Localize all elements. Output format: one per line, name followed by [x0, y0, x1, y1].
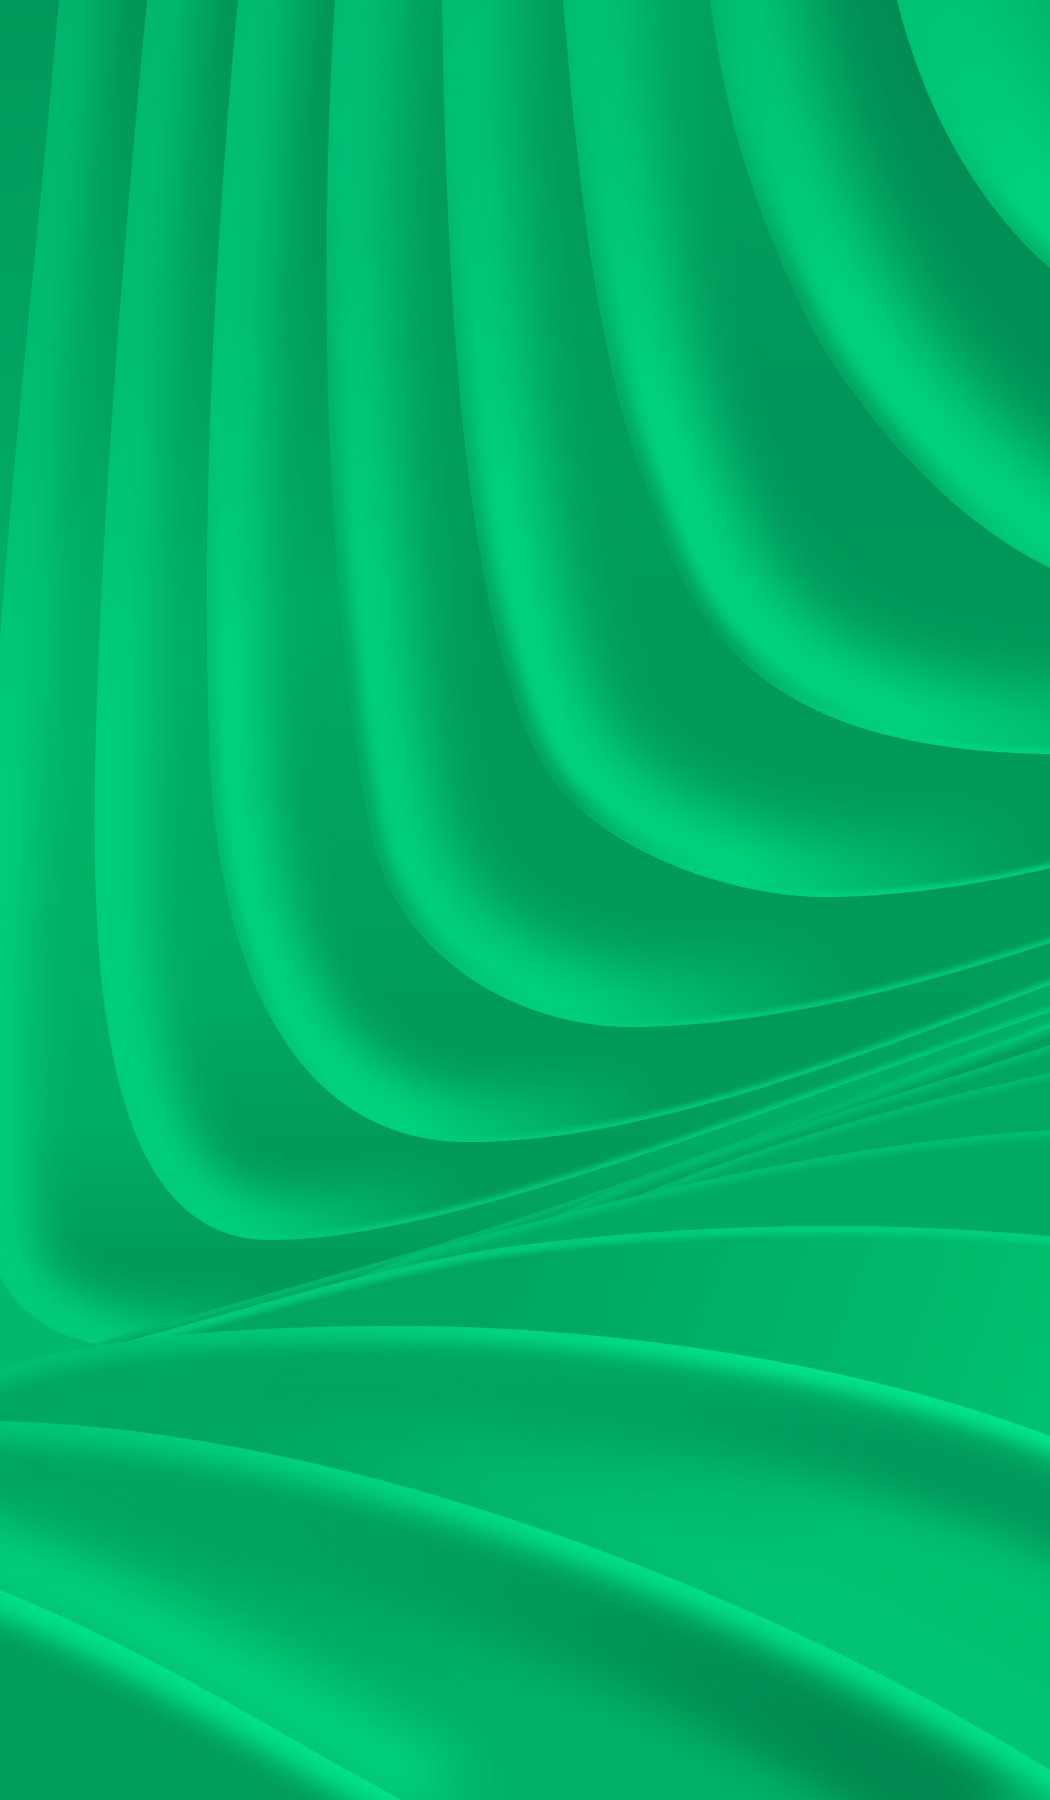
layer O: upper hill [130, 1226, 1050, 1436]
fold band F [563, 0, 1050, 754]
fold band G [710, 0, 1050, 568]
layer L: thin wedge [555, 1045, 1050, 1216]
fold band H [897, 0, 1050, 268]
fold band B [94, 0, 1050, 1240]
layer P: middle hill [0, 1326, 1050, 1670]
top-left shading over the folds [0, 0, 1050, 900]
layer Q: lower hill [0, 1400, 1050, 1800]
layer K: thin wedge [94, 1028, 1050, 1345]
fold band C [207, 0, 1050, 1142]
layer M: thin wedge [640, 1073, 1050, 1195]
fold band E [442, 0, 1050, 897]
layer N: thin wedge [358, 1130, 1050, 1278]
layer R: front hill, bottom left [0, 1590, 402, 1800]
fold band D [326, 0, 1050, 1028]
